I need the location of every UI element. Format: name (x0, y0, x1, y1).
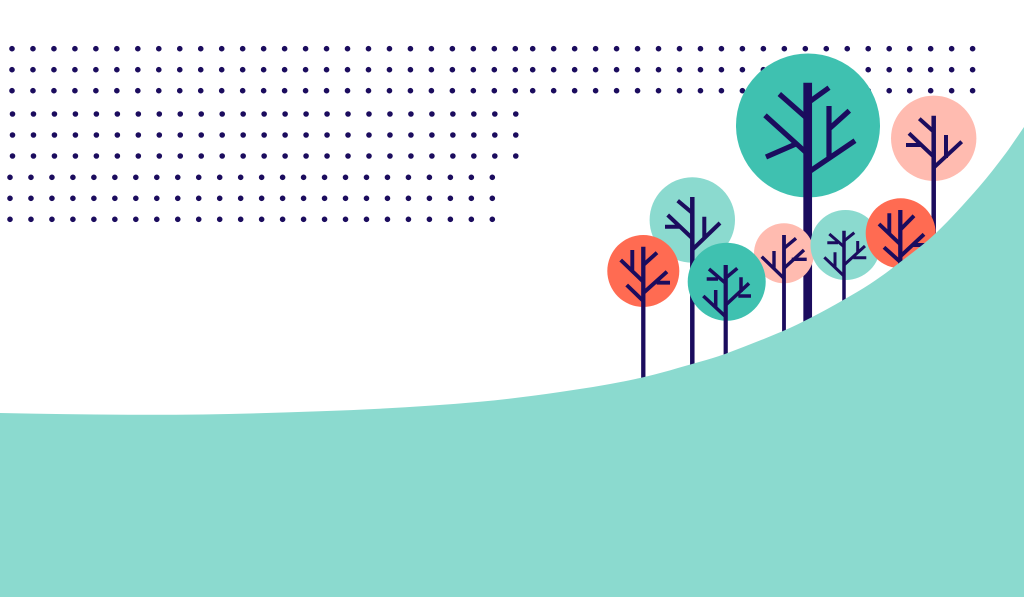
tree: light teal left (650, 177, 735, 375)
tree: teal front (688, 243, 766, 365)
dot grid pattern (10, 49, 974, 219)
tree: small pink (754, 223, 814, 340)
tree: orange right (866, 198, 936, 275)
tree: small light teal (810, 210, 880, 310)
tree: pink right (891, 96, 976, 240)
hill (0, 127, 1024, 597)
tree: large teal (736, 54, 880, 325)
tree: orange left (607, 235, 679, 385)
